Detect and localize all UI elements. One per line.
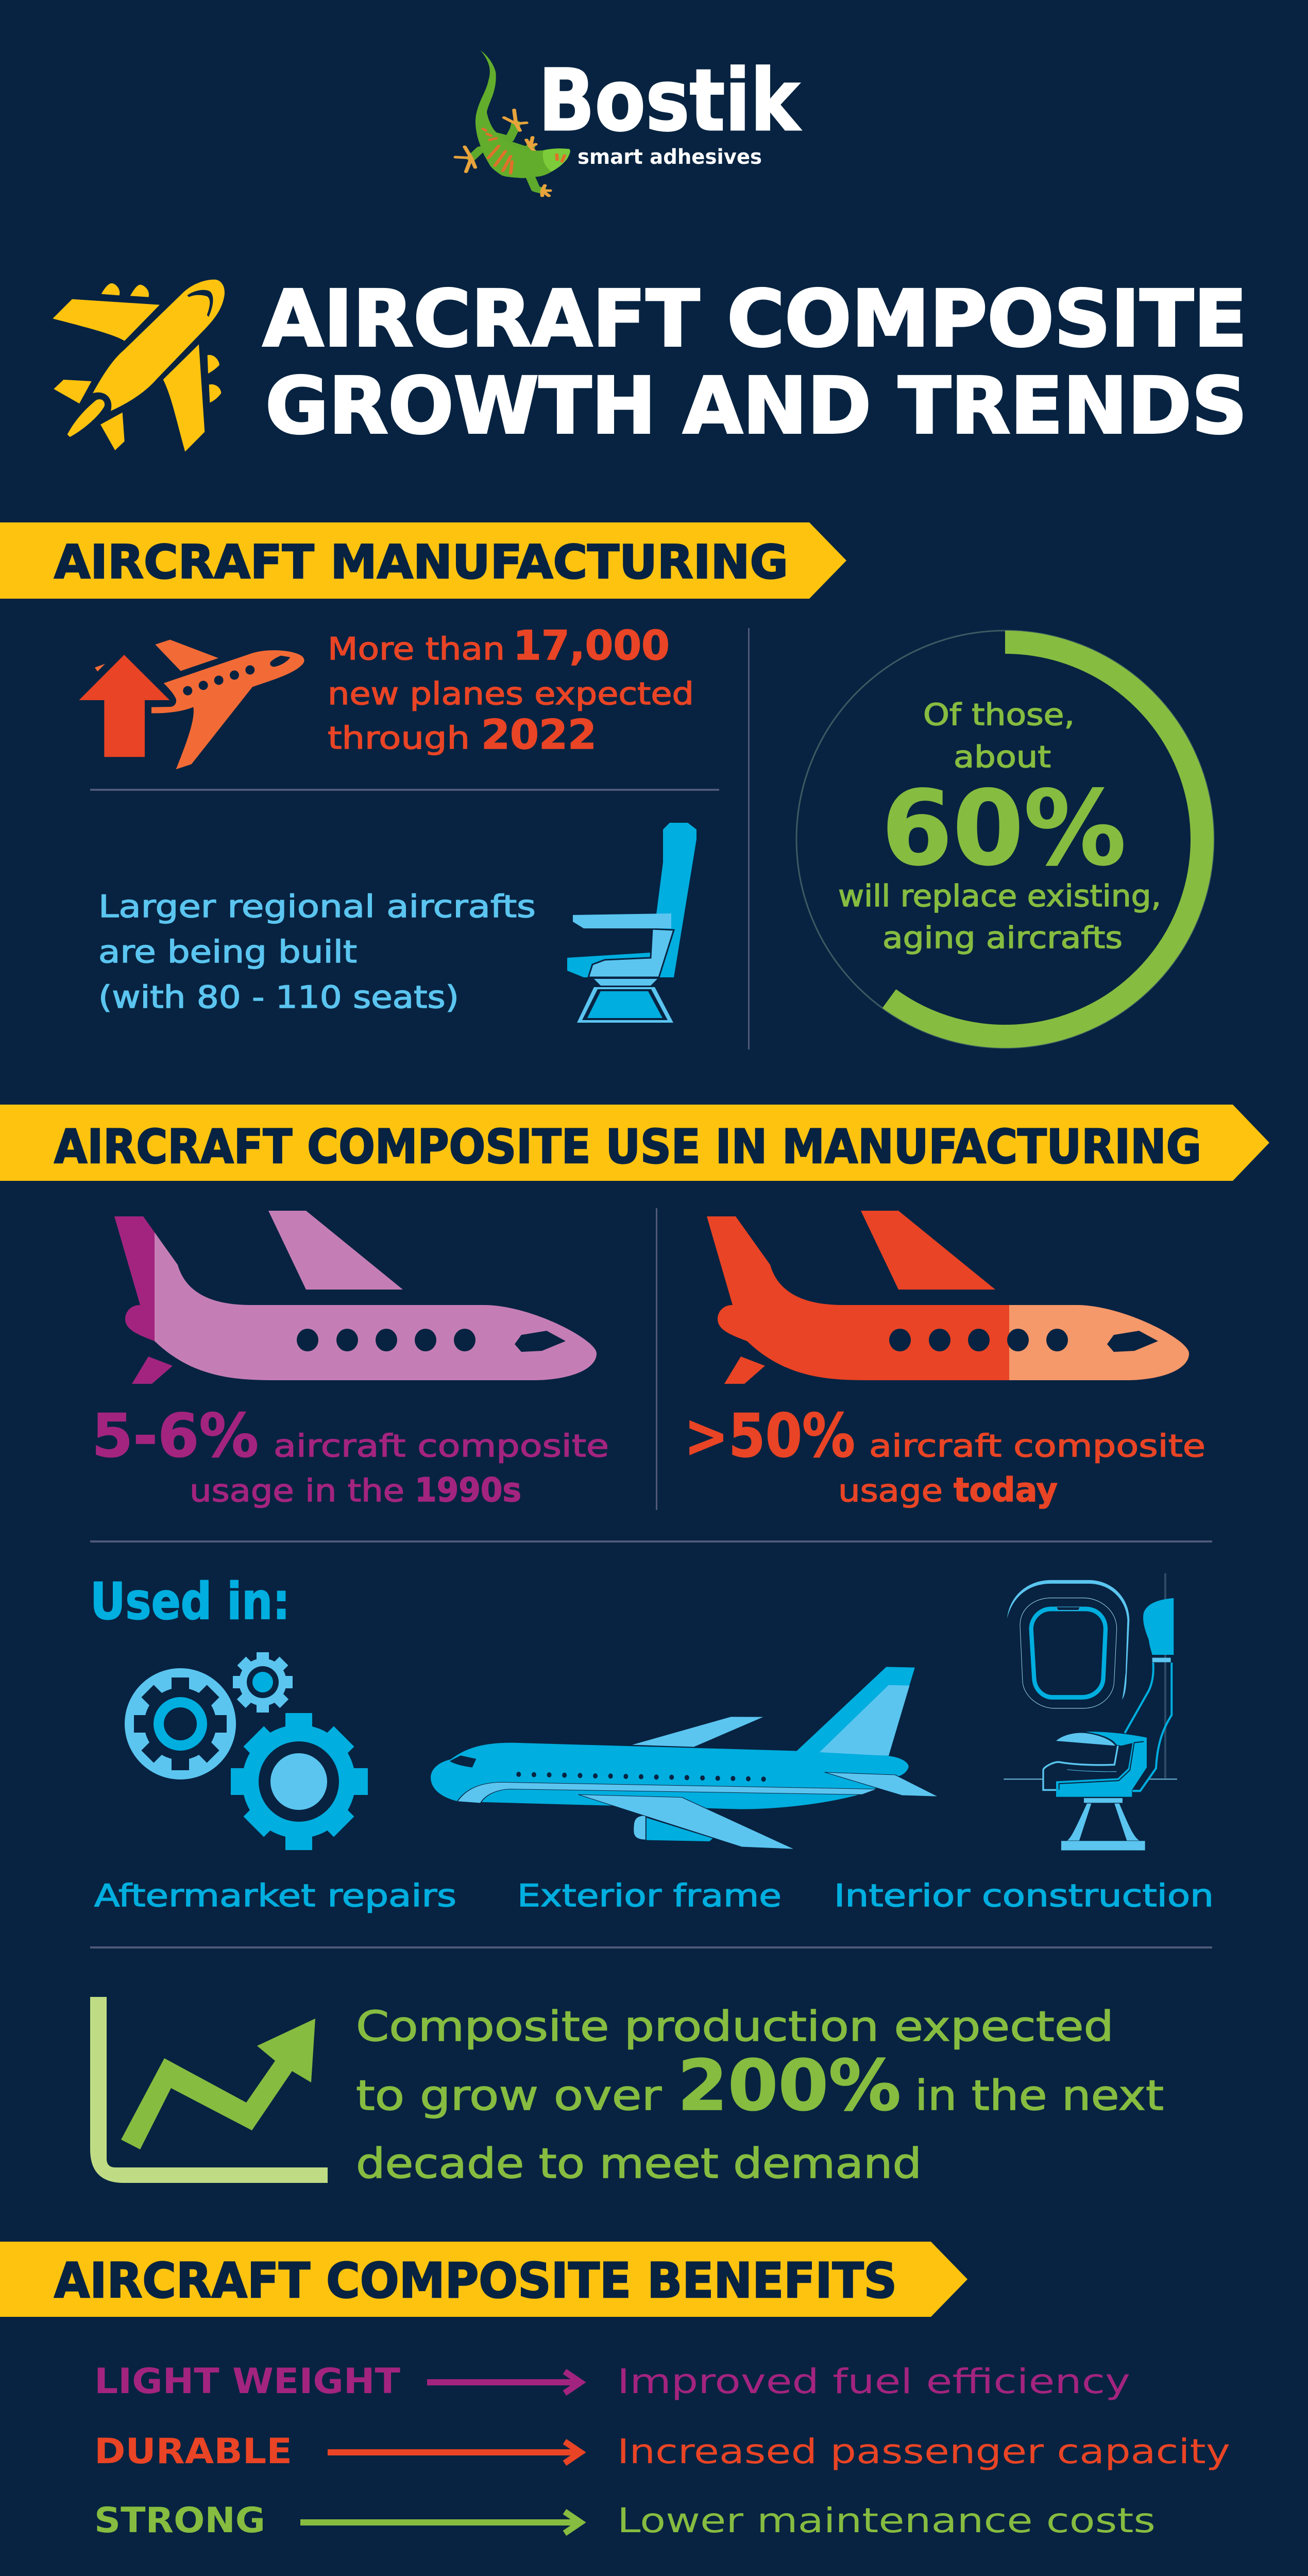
banner: aircraft composite benefits bbox=[0, 2242, 967, 2317]
text: 5-6 percent in the 1990s bbox=[92, 1401, 609, 1510]
benefit: strong: STRONG bbox=[94, 2500, 265, 2541]
text: 5-6 percent in the 1990s: aircraft composite bbox=[274, 1428, 609, 1464]
icon: exterior plane bbox=[431, 1667, 939, 1849]
large gear bbox=[231, 1713, 368, 1850]
banner: aircraft manufacturing: AIRCRAFT MANUFACTURING bbox=[54, 535, 788, 589]
title: AIRCRAFT COMPOSITE bbox=[263, 274, 1247, 364]
text: larger regional aircrafts: (with 80 - 110 seats) bbox=[98, 979, 459, 1015]
icon: yellow plane bbox=[53, 280, 225, 452]
small gear bbox=[233, 1652, 293, 1713]
text: composite production growth: to grow over bbox=[356, 2072, 661, 2120]
benefit: durable: Increased passenger capacity bbox=[617, 2432, 1230, 2471]
text: larger regional aircrafts: are being built bbox=[98, 934, 357, 970]
banner: aircraft composite use in manufacturing bbox=[0, 1105, 1269, 1181]
benefit: light weight: Improved fuel efficiency bbox=[617, 2362, 1130, 2401]
benefit: durable bbox=[94, 2431, 1230, 2472]
brand name: Bostik bbox=[538, 51, 801, 150]
labels: used in categories: Interior construction bbox=[834, 1878, 1214, 1914]
benefit: light weight: LIGHT WEIGHT bbox=[94, 2361, 401, 2402]
text: composite production growth: decade to meet demand bbox=[356, 2140, 922, 2188]
text: 17,000 new planes: new planes expected bbox=[328, 676, 694, 712]
text: 60 percent replace bbox=[838, 697, 1161, 955]
benefit: durable: DURABLE bbox=[94, 2431, 292, 2472]
labels: used in categories bbox=[94, 1878, 1214, 1914]
icon: interior window and seat bbox=[1004, 1573, 1177, 1850]
text: 5-6 percent in the 1990s: 1990s bbox=[415, 1471, 521, 1510]
chart: growth arrow bbox=[90, 1997, 328, 2183]
medium gear bbox=[125, 1668, 236, 1780]
text: composite production growth: 200% bbox=[677, 2045, 901, 2127]
text: over 50 percent today: aircraft composite bbox=[869, 1428, 1205, 1464]
text: larger regional aircrafts: Larger regional aircrafts bbox=[98, 889, 536, 925]
text: composite production growth: Composite production expected bbox=[356, 2003, 1114, 2050]
text: over 50 percent today: today bbox=[954, 1471, 1058, 1510]
text: 17,000 new planes: More than bbox=[328, 631, 505, 667]
panel: benefits list bbox=[94, 2361, 1230, 2541]
text: composite production growth bbox=[356, 2003, 1164, 2188]
banner: aircraft composite benefits: AIRCRAFT COMPOSITE BENEFITS bbox=[54, 2253, 897, 2309]
benefit: light weight bbox=[94, 2361, 1130, 2402]
icon: gears bbox=[125, 1652, 368, 1850]
text: 60 percent replace: 60% bbox=[881, 769, 1126, 889]
panel: composite usage comparison bbox=[92, 1208, 1205, 1510]
banner: aircraft manufacturing bbox=[0, 522, 846, 599]
icon: today plane bbox=[707, 1211, 1189, 1384]
tagline: smart adhesives bbox=[577, 145, 762, 169]
text: 17,000 new planes: 2022 bbox=[481, 712, 597, 758]
title bbox=[263, 274, 1247, 451]
icon: gecko bbox=[455, 50, 570, 196]
text: over 50 percent today bbox=[684, 1401, 1205, 1510]
heading: used in: Used in: bbox=[90, 1572, 290, 1631]
labels: used in categories: Exterior frame bbox=[517, 1878, 782, 1914]
text: 17,000 new planes: 17,000 bbox=[513, 623, 670, 669]
text: 60 percent replace: about bbox=[954, 739, 1051, 774]
text: 60 percent replace: aging aircrafts bbox=[882, 920, 1123, 955]
title: GROWTH AND TRENDS bbox=[265, 361, 1247, 451]
icon: arrow and orange plane bbox=[79, 640, 304, 769]
text: 17,000 new planes bbox=[328, 623, 694, 758]
benefit: strong bbox=[94, 2500, 1156, 2541]
text: 5-6 percent in the 1990s: 5-6% bbox=[92, 1401, 259, 1471]
panel: aircraft manufacturing bbox=[79, 623, 1214, 1049]
labels: used in categories: Aftermarket repairs bbox=[94, 1878, 456, 1914]
chart: 60 percent ring bbox=[796, 631, 1214, 1048]
text: composite production growth: in the next bbox=[915, 2072, 1164, 2120]
banner: aircraft composite use in manufacturing: AIRCRAFT COMPOSITE USE IN MANUFACTURING bbox=[54, 1120, 1201, 1174]
text: 60 percent replace: Of those, bbox=[923, 697, 1075, 732]
benefit: strong: Lower maintenance costs bbox=[617, 2501, 1156, 2540]
text: larger regional aircrafts bbox=[98, 889, 536, 1015]
text: 60 percent replace: will replace existing, bbox=[838, 878, 1161, 913]
logo: Bostik smart adhesives bbox=[455, 50, 801, 196]
text: 17,000 new planes: through bbox=[328, 720, 470, 756]
icon: 1990s plane bbox=[114, 1211, 597, 1384]
text: 5-6 percent in the 1990s: usage in the bbox=[190, 1473, 404, 1509]
text: over 50 percent today: usage bbox=[838, 1473, 943, 1509]
text: over 50 percent today: >50% bbox=[684, 1401, 855, 1471]
icon: seat bbox=[567, 823, 697, 1023]
